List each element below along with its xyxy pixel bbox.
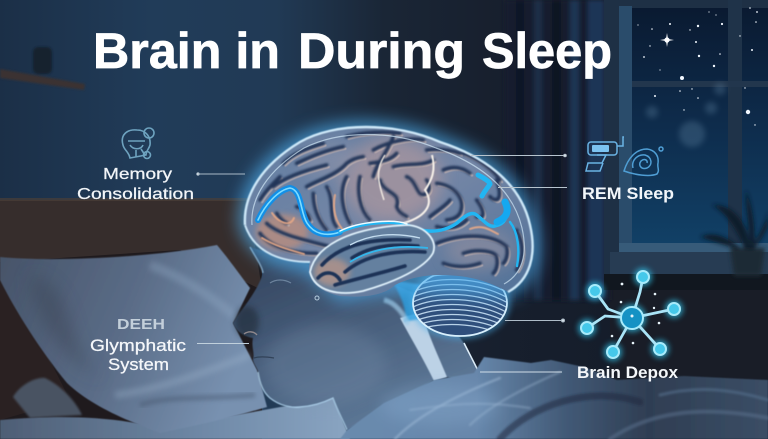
lips — [254, 357, 274, 358]
sulci — [260, 132, 522, 273]
temporal lobe — [308, 224, 436, 294]
label: deep: DEEH — [117, 317, 165, 333]
nostril — [244, 332, 257, 335]
leader line — [197, 342, 249, 344]
translucent head profile — [233, 247, 486, 430]
soft night bokeh — [646, 83, 726, 147]
title: During — [298, 23, 465, 79]
window with night sky — [604, 0, 768, 290]
brain — [238, 120, 540, 302]
jaw light — [263, 325, 387, 405]
title: Sleep — [482, 23, 612, 79]
bright central sulcus — [400, 155, 434, 224]
leader lines — [480, 319, 564, 372]
title: Brain in — [93, 23, 280, 79]
neck column and spine — [384, 280, 486, 387]
small back pillow — [13, 378, 82, 418]
star sparkle — [660, 33, 674, 47]
temple marker — [315, 296, 319, 300]
labels: memory consolidation: Memory — [103, 166, 172, 183]
network glow — [578, 268, 683, 361]
profile outline — [258, 372, 347, 430]
potted plant — [700, 190, 768, 276]
leader lines — [470, 154, 567, 188]
blanket highlight — [380, 385, 500, 425]
network sparks — [611, 283, 660, 344]
icon: neural network — [578, 268, 683, 361]
leader line — [196, 172, 245, 176]
cerebellum — [409, 266, 511, 340]
gyrus highlights — [262, 134, 524, 275]
nose shadow — [235, 306, 259, 338]
brain glow — [238, 120, 540, 302]
callout: rem sleep — [470, 137, 674, 203]
labels: memory consolidation: Consolidation — [77, 186, 194, 203]
label: rem sleep: REM Sleep — [582, 184, 674, 203]
shelf — [0, 47, 85, 90]
headboard — [0, 198, 262, 439]
blanket — [340, 357, 768, 439]
bottom sheet — [0, 398, 350, 439]
icon: sleep device — [586, 137, 624, 171]
labels: memory consolidation — [77, 166, 194, 203]
eye — [270, 280, 291, 283]
callout: glymphatic system — [90, 317, 249, 374]
cortex outlines — [245, 127, 533, 292]
pillow — [0, 245, 267, 433]
labels: glymphatic system — [90, 337, 186, 374]
icon: memory head — [122, 128, 154, 158]
callout: memory consolidation — [77, 128, 245, 203]
title — [93, 23, 612, 79]
callout: brain detox — [480, 268, 683, 382]
cyan glymphatic channels — [258, 175, 518, 266]
icon: sleep spiral — [624, 147, 663, 175]
labels: glymphatic system: Glymphatic — [90, 337, 186, 355]
network nodes — [581, 271, 680, 358]
cortex — [245, 128, 532, 296]
label: brain depox: Brain Depox — [577, 364, 679, 382]
labels: glymphatic system: System — [108, 356, 169, 374]
warm gyri — [262, 195, 498, 254]
network branches — [587, 277, 674, 352]
stars — [637, 7, 758, 126]
curtain — [505, 0, 610, 300]
